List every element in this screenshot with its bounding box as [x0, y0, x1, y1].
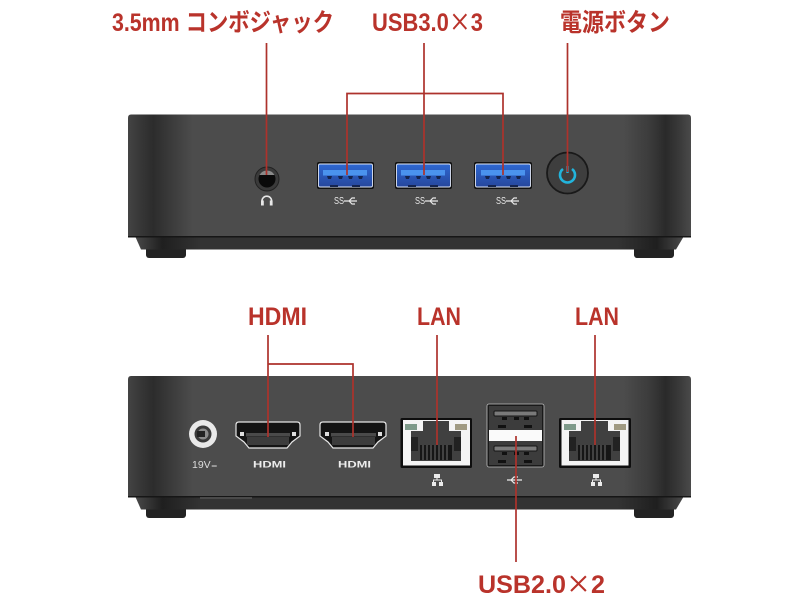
- USB 3.0 port 1: [317, 162, 374, 189]
- foot: rear left: [146, 505, 186, 518]
- leader lines: HDMI bracket: [268, 335, 353, 437]
- icon: network 2: [591, 474, 602, 486]
- icon: USB SS 3: SS: [496, 196, 506, 207]
- icon: HDMI logo 2: HDMI: [338, 460, 371, 470]
- label: USB 2.0 x2: USB2.0×2: [478, 565, 605, 600]
- leader line: audio jack: [266, 43, 268, 175]
- leader line: LAN right: [594, 335, 596, 445]
- icon: USB SS 2: SS: [415, 196, 425, 207]
- foot: rear right: [634, 505, 674, 518]
- label: LAN left: LAN: [417, 303, 461, 331]
- icon: headphones: [261, 196, 273, 206]
- icon: USB SS 3: [496, 196, 519, 207]
- icon: USB trident: [507, 477, 522, 483]
- label: LAN right: LAN: [575, 303, 619, 331]
- label: 19V: 19V═: [192, 459, 217, 471]
- label: audio jack: 3.5mm コンボジャック: [112, 9, 334, 37]
- device: rear view: [128, 376, 691, 518]
- label: HDMI: HDMI: [248, 303, 307, 331]
- icon: USB SS 1: [334, 196, 357, 207]
- leader line: LAN left: [436, 335, 438, 445]
- icon: HDMI logo 1: HDMI: [253, 460, 286, 470]
- HDMI port 1: [236, 422, 300, 448]
- dual USB 2.0 port: [487, 404, 544, 467]
- icon: USB SS 1: SS: [334, 196, 344, 207]
- leader line: USB 2.0: [515, 436, 517, 562]
- power button: [547, 152, 588, 194]
- foot: left: [146, 245, 186, 258]
- rear base band: [135, 496, 684, 510]
- leader line: power button: [566, 43, 568, 172]
- foot: right: [634, 245, 674, 258]
- USB 3.0 port 2: [395, 162, 452, 189]
- HDMI port 2: [320, 422, 386, 448]
- audio jack: [255, 167, 279, 191]
- DC power jack: [189, 420, 217, 448]
- leader lines: USB 3.0 bracket: [347, 43, 503, 175]
- rear face: [128, 376, 691, 497]
- label: USB 3.0 x3: USB3.0×3: [372, 3, 483, 39]
- front face: [128, 114, 691, 237]
- LAN port 1: [400, 418, 472, 468]
- icon: network 1: [432, 474, 443, 486]
- base band: [135, 236, 684, 250]
- device: front view: [128, 114, 691, 258]
- label: power button: 電源ボタン: [560, 9, 670, 37]
- icon: USB SS 2: [415, 196, 438, 207]
- LAN port 2: [559, 418, 631, 468]
- USB 3.0 port 3: [474, 162, 532, 189]
